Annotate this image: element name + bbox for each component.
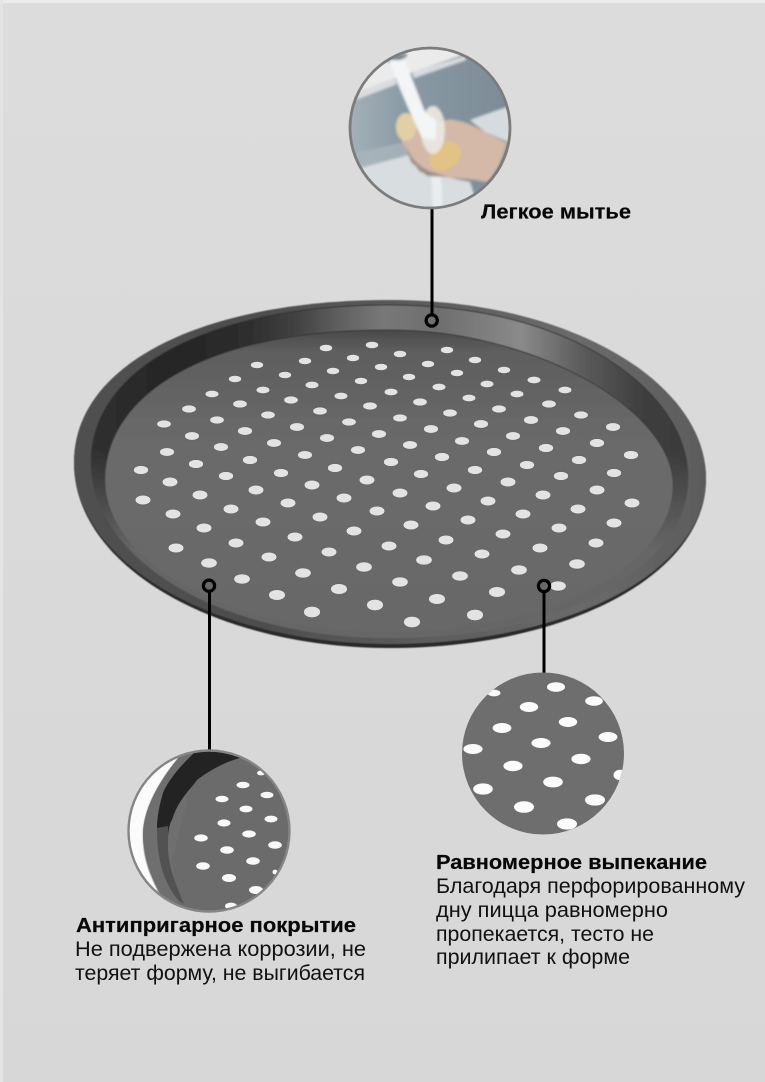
tray wall [91, 305, 688, 638]
pizza tray [74, 300, 706, 648]
edge shadow [155, 873, 168, 905]
connector: washing [426, 209, 437, 326]
sink edge top [360, 49, 462, 92]
label: easy washing: Легкое мытье [481, 200, 631, 224]
lower wall [157, 826, 184, 904]
lower sink [362, 154, 475, 207]
text block: even baking: Благодаря перфорированному [436, 875, 746, 898]
photo circle: nonstick coating [125, 748, 295, 918]
upper dark wall [157, 752, 240, 836]
text block: nonstick coating: Антипригарное покрытие [76, 914, 356, 937]
connector: nonstick [203, 580, 215, 750]
text block: even baking: дну пицца равномерно [436, 899, 668, 922]
photo circle: washing under the tap [348, 46, 512, 210]
falling water [432, 176, 442, 206]
text block: even baking: Равномерное выпекание [436, 851, 707, 874]
perforation holes [134, 342, 640, 628]
tray rim [74, 300, 706, 648]
hand [397, 120, 507, 182]
water foam on potato [421, 106, 445, 154]
right sink edge [470, 106, 509, 143]
faucet [386, 53, 408, 64]
connector: even baking [538, 580, 550, 673]
rim band [143, 758, 180, 898]
text block: even baking: прилипает к форме [436, 946, 630, 969]
text block: nonstick coating: Не подвержена коррозии, не [75, 938, 366, 961]
text block: nonstick coating: теряет форму, не выгибается [75, 962, 365, 985]
white background crescent [130, 758, 178, 893]
text block: nonstick coating [75, 914, 366, 985]
text block: even baking [436, 851, 746, 969]
floor holes [194, 771, 282, 909]
water stream [389, 60, 436, 140]
tray floor [105, 330, 673, 632]
text block: even baking: пропекается, тесто не [436, 923, 654, 946]
photo circle: perforated bottom [462, 672, 626, 834]
potato [428, 140, 462, 172]
